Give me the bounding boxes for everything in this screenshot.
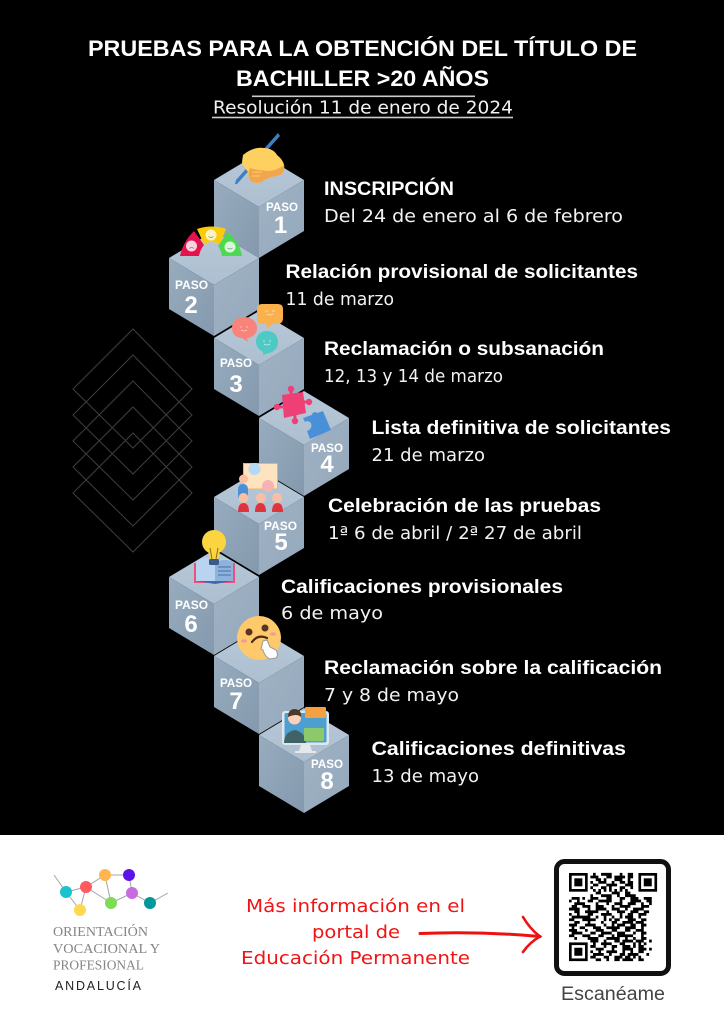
step 1 cube: 1	[274, 212, 287, 239]
step 5 text: Celebración de las pruebas	[328, 496, 601, 517]
step 2 cube: 2	[184, 292, 198, 319]
title line 1: PRUEBAS PARA LA OBTENCIÓN DEL TÍTULO DE	[88, 36, 637, 61]
step 4 text: Lista definitiva de solicitantes	[372, 418, 671, 439]
header: title and resolution	[88, 36, 637, 118]
step 5 cube: 5	[274, 529, 288, 556]
step 4 text	[372, 418, 671, 466]
white footer panel	[0, 835, 724, 1024]
step 3 cube: 3	[229, 371, 243, 398]
step 6 cube	[169, 550, 259, 655]
step 8 cube	[259, 708, 349, 813]
red call to action text: portal de	[312, 922, 400, 943]
step 3 text: Reclamación o subsanación	[324, 339, 604, 360]
step 8 cube: 8	[320, 768, 334, 795]
step 8 cube: PASO	[311, 757, 343, 771]
title line 2: BACHILLER >20 AÑOS	[236, 66, 489, 91]
red call to action text: Educación Permanente	[241, 948, 470, 969]
step 1 cube: PASO	[266, 200, 298, 214]
step 5 text: 1ª 6 de abril / 2ª 27 de abril	[328, 523, 582, 544]
step 8 text	[372, 739, 626, 787]
logo text: PROFESIONAL	[53, 958, 144, 972]
step 1 text	[324, 178, 623, 227]
icon: satisfaction gauge	[180, 226, 242, 256]
scan me caption: Escanéame	[561, 984, 665, 1005]
step 2 text: 11 de marzo	[286, 289, 394, 310]
step 7 text	[324, 658, 662, 706]
step 1 cube	[214, 153, 304, 258]
icon: video call monitor	[282, 707, 329, 753]
step 2 text: Relación provisional de solicitantes	[286, 262, 638, 283]
step 8 text: 13 de mayo	[372, 766, 479, 787]
icon: writing hand	[235, 133, 284, 184]
icon: speech bubbles	[232, 304, 283, 355]
arrow to QR code	[420, 917, 540, 952]
step 4 cube: PASO	[311, 441, 343, 455]
step 6 text: Calificaciones provisionales	[281, 577, 563, 598]
logo text: VOCACIONAL Y	[53, 941, 160, 956]
red call to action text	[241, 896, 470, 969]
step 6 cube: PASO	[175, 598, 208, 612]
step 2 text	[286, 262, 638, 310]
step 4 cube: 4	[320, 451, 334, 478]
icon: puzzle pieces	[274, 386, 331, 439]
step 1 text: INSCRIPCIÓN	[324, 178, 454, 200]
step 3 cube	[214, 311, 304, 416]
step 6 text: 6 de mayo	[281, 603, 383, 624]
step 4 cube	[259, 391, 349, 496]
step 7 cube: 7	[229, 688, 243, 715]
step 1 text: Del 24 de enero al 6 de febrero	[324, 206, 623, 227]
step 6 text	[281, 577, 563, 624]
QR code	[556, 862, 668, 974]
subtitle resolution: Resolución 11 de enero de 2024	[213, 98, 513, 118]
step 5 text	[328, 496, 601, 544]
red call to action text: Más información en el	[246, 896, 465, 917]
step 2 cube	[169, 231, 259, 336]
icon: light bulb and book	[194, 530, 235, 584]
step 3 cube: PASO	[220, 356, 252, 370]
icon: thinking face	[237, 616, 281, 660]
step 8 text: Calificaciones definitivas	[372, 739, 626, 760]
step 7 cube: PASO	[220, 676, 252, 690]
logo: Orientación Vocacional y Profesional Andalucía	[53, 869, 168, 993]
step 3 text	[324, 339, 604, 387]
logo text: ANDALUCÍA	[55, 978, 142, 993]
step 2 cube: PASO	[175, 278, 208, 292]
logo text	[53, 924, 160, 993]
step 5 cube	[214, 470, 304, 575]
step 3 text: 12, 13 y 14 de marzo	[324, 366, 503, 387]
logo network graphic	[54, 869, 168, 916]
step 7 text: 7 y 8 de mayo	[324, 685, 459, 706]
step 6 cube: 6	[184, 611, 198, 638]
step 7 text: Reclamación sobre la calificación	[324, 658, 662, 679]
step 4 text: 21 de marzo	[372, 445, 485, 466]
logo text: ORIENTACIÓN	[53, 924, 148, 939]
decorative diamonds	[73, 329, 192, 552]
step 5 cube: PASO	[264, 519, 297, 533]
icon: presenter and audience	[238, 463, 283, 512]
step 7 cube	[214, 629, 304, 734]
